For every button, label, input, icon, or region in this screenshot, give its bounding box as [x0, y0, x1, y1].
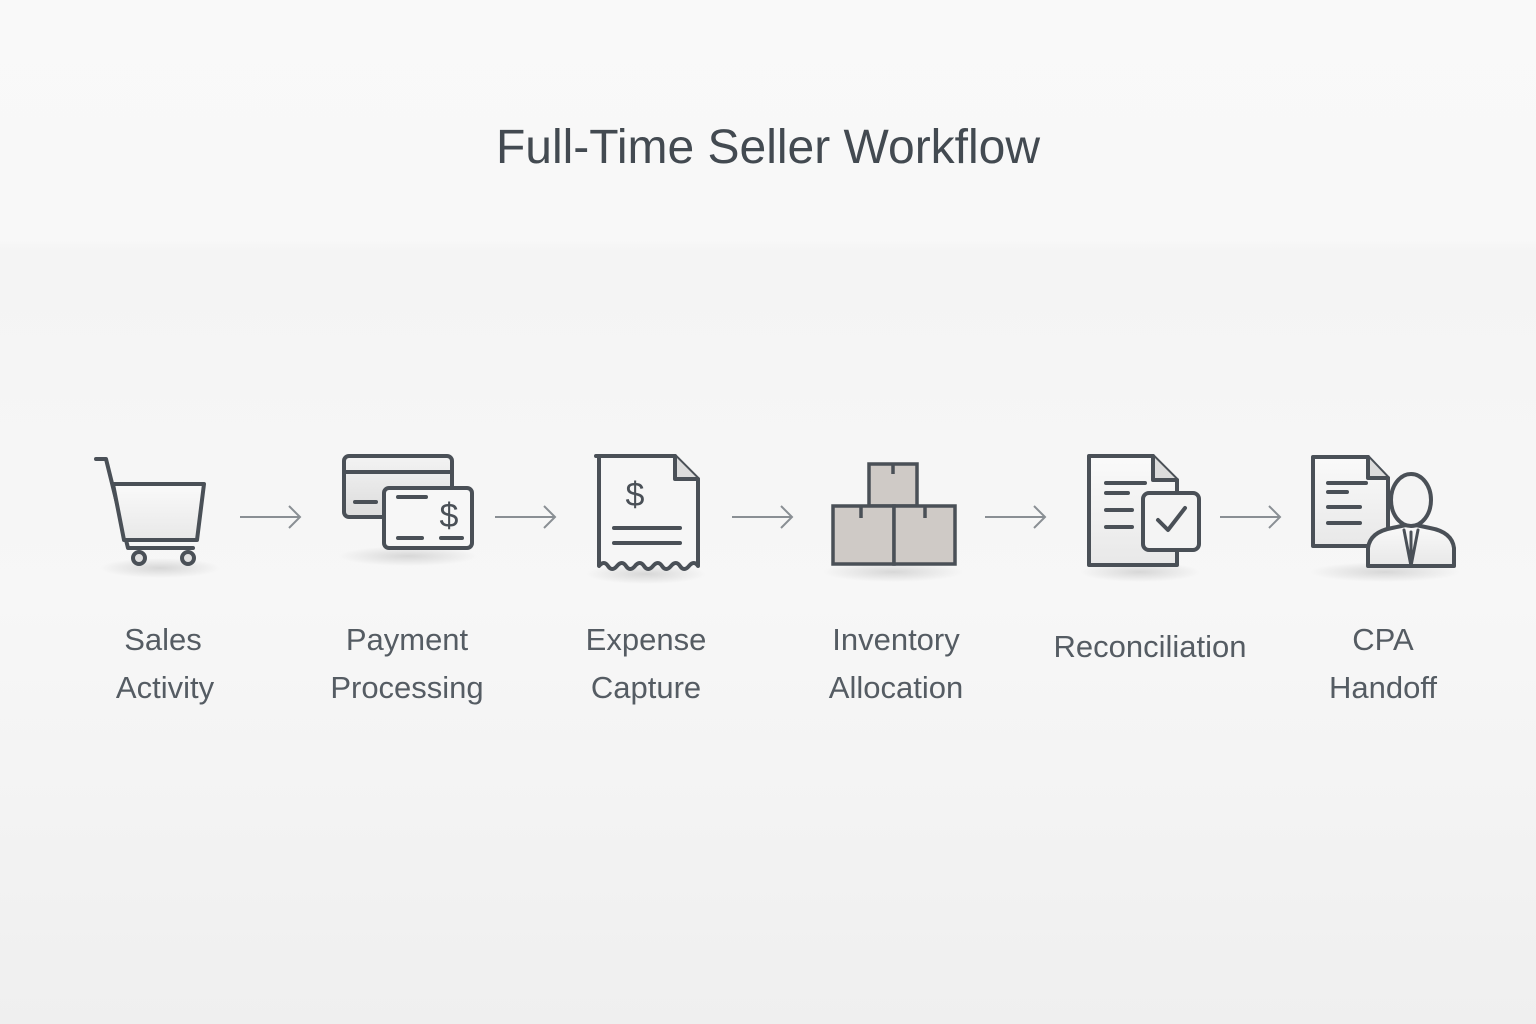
labels — [116, 622, 1437, 705]
icon: CPA handoff — [1313, 457, 1454, 566]
labels: Expense — [586, 622, 706, 657]
arrow 4 — [985, 506, 1045, 528]
icon: payment cards — [344, 456, 472, 548]
labels: Payment — [346, 622, 469, 657]
icon: receipt: $ — [626, 476, 645, 514]
arrow 5 — [1220, 506, 1280, 528]
arrow 1 — [240, 506, 300, 528]
labels: Sales — [124, 622, 202, 657]
icon: boxes — [833, 464, 955, 564]
labels: Reconciliation — [1054, 629, 1246, 664]
labels: Handoff — [1329, 670, 1437, 705]
icon: shopping cart — [96, 459, 204, 564]
labels: Allocation — [829, 670, 963, 705]
arrow 3 — [732, 506, 792, 528]
title: Full-Time Seller Workflow — [496, 121, 1040, 174]
labels: Processing — [330, 670, 484, 705]
labels: Activity — [116, 670, 215, 705]
labels: Inventory — [832, 622, 960, 657]
icon: reconciliation — [1089, 456, 1199, 565]
labels: CPA — [1352, 622, 1414, 657]
labels: Capture — [591, 670, 701, 705]
icon: payment cards: $ — [440, 497, 459, 535]
icon: receipt — [596, 456, 698, 569]
arrow 2 — [495, 506, 555, 528]
